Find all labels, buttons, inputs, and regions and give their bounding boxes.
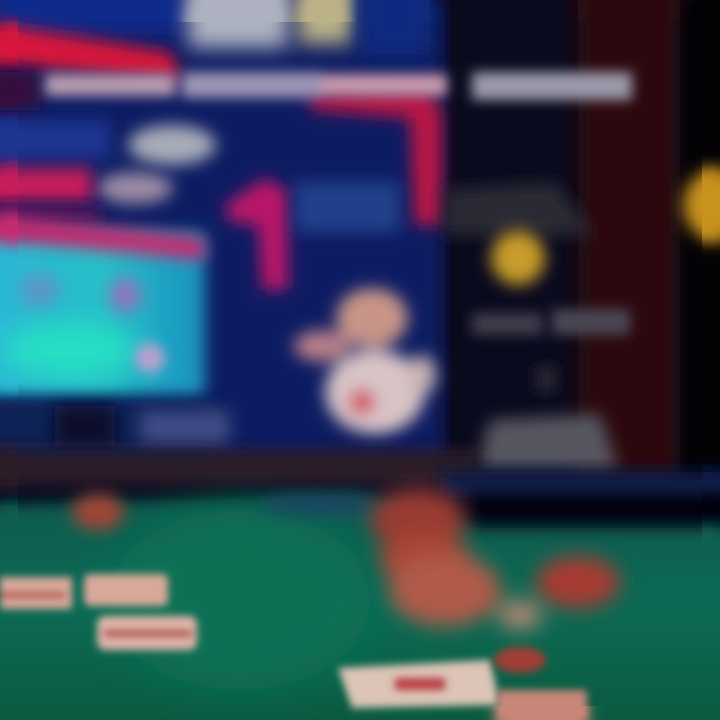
gold coin right: [683, 168, 720, 242]
grey block lower right: [475, 414, 618, 470]
red neon stripe top: [0, 24, 442, 225]
top banner figures: [188, 0, 430, 55]
mascot figure: [294, 288, 436, 434]
blue panel text: [295, 182, 400, 232]
arcade screen: [0, 215, 205, 396]
grey text bar: [472, 309, 630, 393]
chip stacks centre: [370, 488, 620, 630]
cards bottom: [338, 647, 587, 720]
blurred headline: [45, 72, 632, 100]
cards left: [0, 574, 197, 650]
lower screen strip: [0, 402, 230, 448]
table rail: [0, 450, 720, 524]
green felt table: [0, 494, 720, 720]
mid banner logo: [0, 120, 216, 225]
gold coin centre: [491, 231, 545, 285]
grey roof panel: [445, 182, 595, 235]
chip top left: [72, 494, 124, 530]
pink number one: [224, 178, 288, 290]
